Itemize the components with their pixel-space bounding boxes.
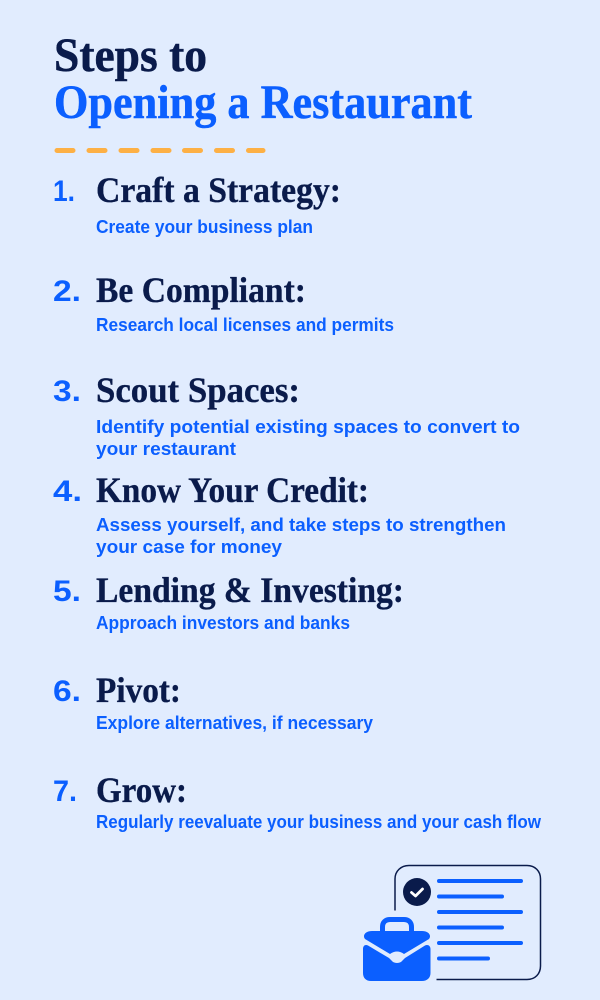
step 7: Grow: [96,770,187,810]
step 3: Identify potential existing spaces to convert to [96,417,520,437]
checklist lines [439,881,521,958]
step 3 [53,370,520,459]
title: Steps to [54,29,207,82]
icon: check badge [403,878,431,906]
step 1: Craft a Strategy: [96,170,341,210]
step 5: 5. [53,575,81,608]
icon: checklist card and briefcase [363,866,540,981]
title: Opening a Restaurant [54,76,472,129]
step 4: your case for money [96,537,282,557]
icon: document card [395,866,540,980]
step 4: Know Your Credit: [96,470,369,510]
title [54,29,472,129]
step 6 [53,670,373,733]
step 7: 7. [53,775,77,808]
step 6: Pivot: [96,670,181,710]
step 5 [53,570,404,633]
step 3: your restaurant [96,439,236,459]
step 1: Create your business plan [96,217,313,237]
step 3: Scout Spaces: [96,370,300,410]
step 1 [53,170,341,237]
step 2: Research local licenses and permits [96,315,394,335]
step 4: 4. [53,475,82,508]
step 5: Approach investors and banks [96,613,350,633]
step 4 [53,470,506,557]
step 2: 2. [53,275,81,308]
step 2: Be Compliant: [96,270,306,310]
step 6: 6. [53,675,81,708]
step 7 [53,770,542,832]
step 3: 3. [53,375,81,408]
step 1: 1. [53,175,75,208]
step 5: Lending & Investing: [96,570,404,610]
step 2 [53,270,394,335]
step 4: Assess yourself, and take steps to strengthen [96,515,506,535]
step 7: Regularly reevaluate your business and your cash flow [96,812,542,832]
step 6: Explore alternatives, if necessary [96,713,373,733]
icon: briefcase [363,920,430,981]
